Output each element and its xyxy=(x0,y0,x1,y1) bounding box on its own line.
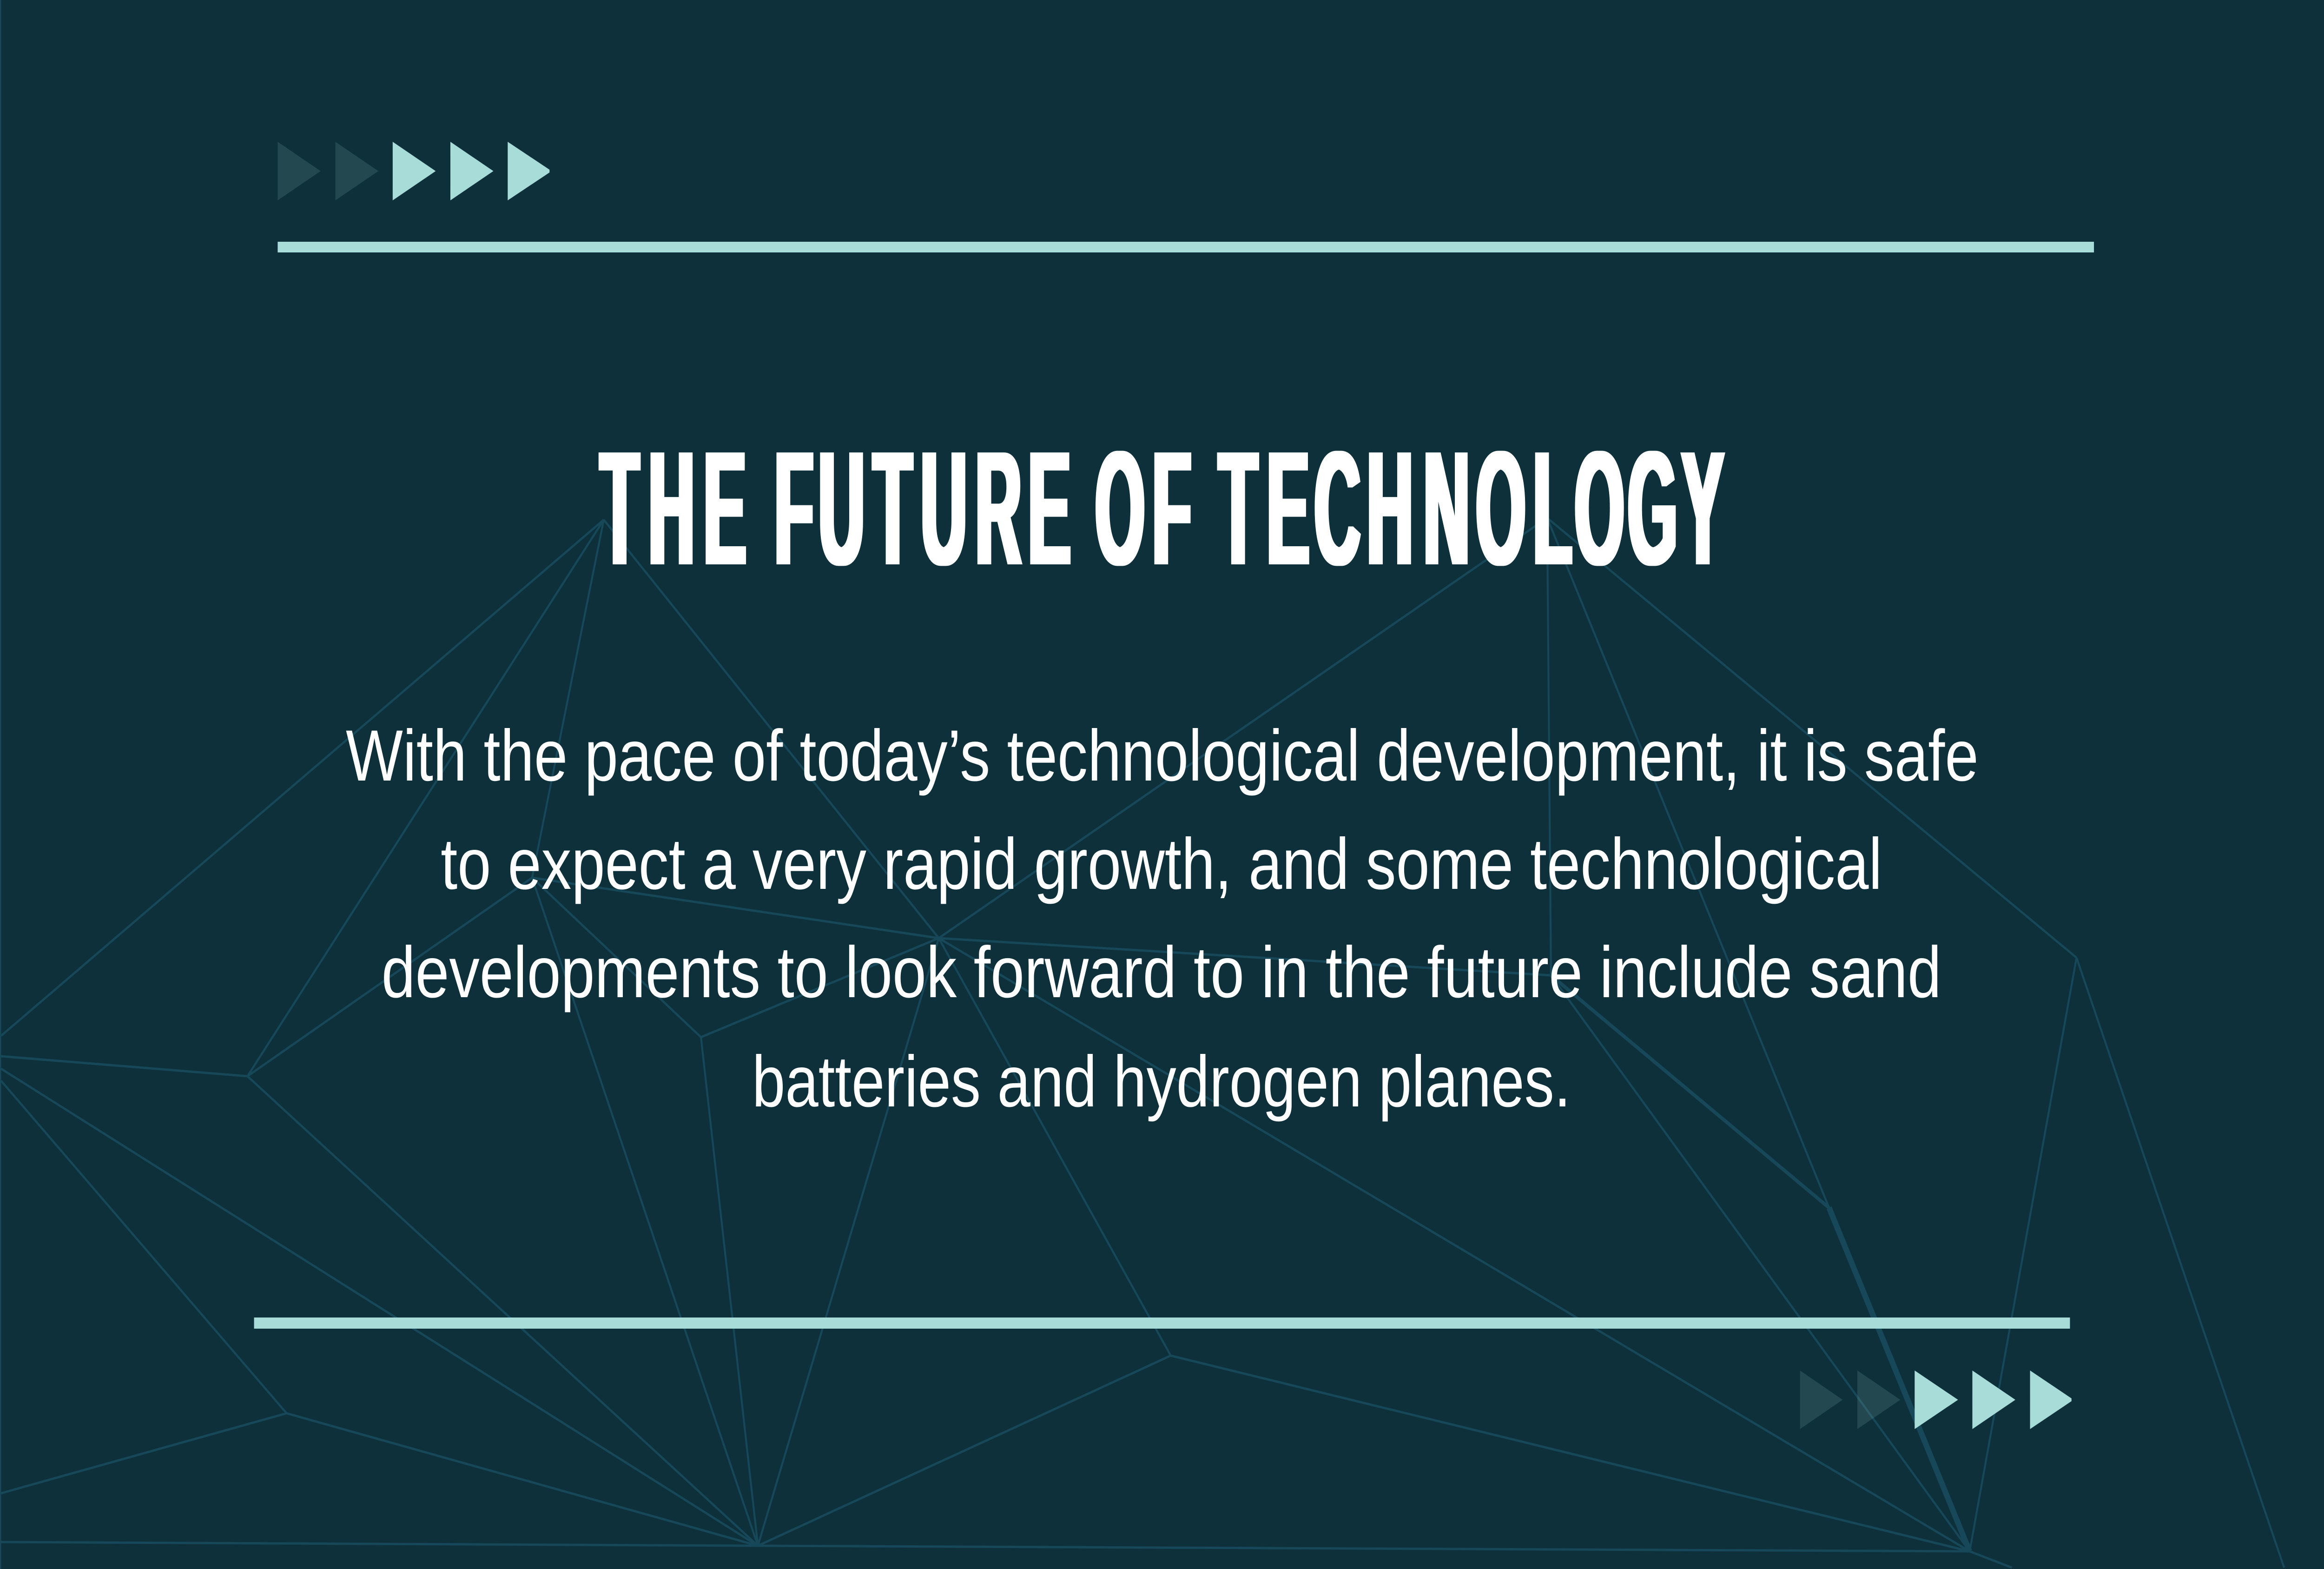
body paragraph: With the pace of today’s technological development, it is safe xyxy=(346,715,1979,796)
top divider bar xyxy=(277,242,2094,252)
body paragraph: developments to look forward to in the future include sand xyxy=(382,932,1941,1013)
bottom arrow row xyxy=(1800,1370,2072,1429)
body paragraph xyxy=(346,715,1979,1122)
title: THE FUTURE OF TECHNOLOGY xyxy=(600,417,1724,599)
body paragraph: to expect a very rapid growth, and some technological xyxy=(441,824,1882,905)
top arrow row xyxy=(277,142,549,200)
bottom divider bar xyxy=(254,1317,2070,1329)
body paragraph: batteries and hydrogen planes. xyxy=(752,1041,1571,1122)
